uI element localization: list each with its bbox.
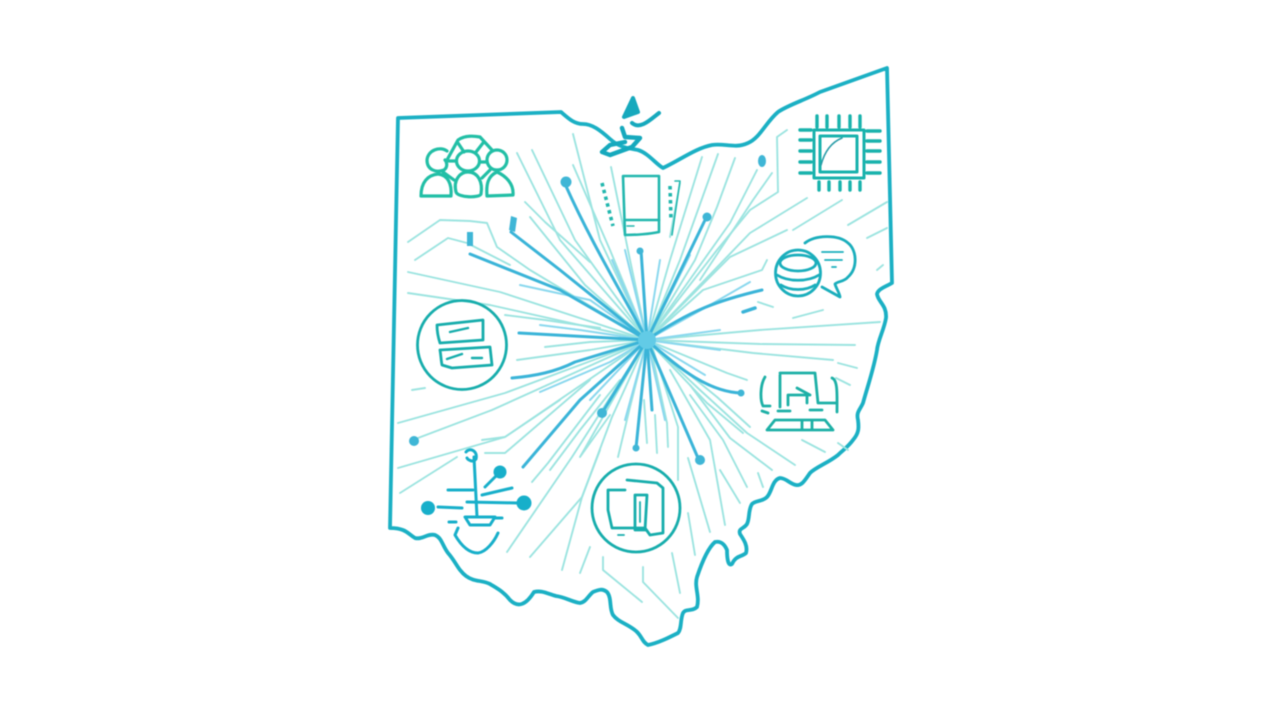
icon: circled server blocks bbox=[592, 464, 680, 552]
light teal outer rays bbox=[398, 130, 887, 618]
central hub bbox=[638, 331, 656, 349]
light blue inner rays bbox=[520, 250, 750, 420]
network nodes bbox=[409, 155, 766, 465]
icon: tablet device bbox=[602, 176, 680, 235]
icon: people group bbox=[421, 136, 513, 197]
icon: circuit diagram with keyboard bbox=[761, 373, 837, 430]
state outline: Ohio bbox=[390, 68, 892, 645]
dark rays with endpoint nodes bbox=[470, 184, 762, 467]
icon: running figure on lake shore bbox=[602, 98, 659, 155]
icon: circuit node tree bbox=[438, 450, 518, 553]
icon: database with speech bubble bbox=[776, 237, 855, 297]
icon: microchip bbox=[800, 116, 880, 190]
icon: circuit nodes bbox=[421, 466, 532, 515]
icon: circled documents bbox=[418, 300, 506, 390]
